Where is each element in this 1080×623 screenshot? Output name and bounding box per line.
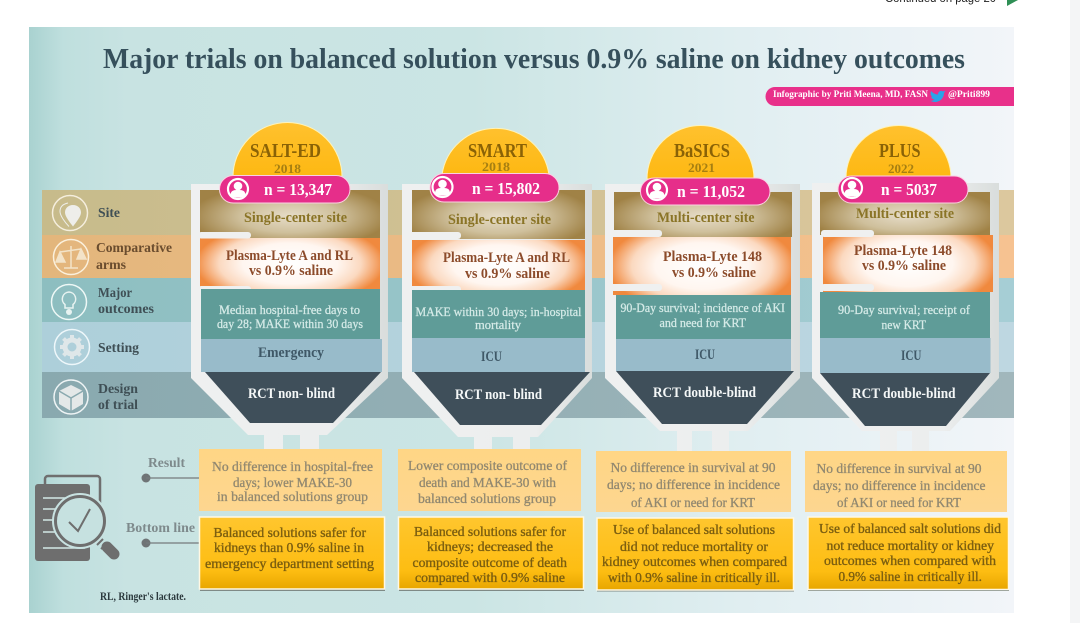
result box: PLUS: No difference in survival at 90 [816,461,982,476]
author credit pill [766,87,1014,106]
arms cell [609,230,791,295]
design cell [205,372,381,423]
result box: SMART: balanced solutions group [418,491,556,506]
row label: design of trial: Design [98,382,138,397]
dome: PLUS title [846,126,951,178]
outcomes cell: day 28; MAKE within 30 days [217,317,363,331]
row label: major outcomes [52,284,155,320]
sample size pill: n = 5037 [881,180,937,199]
dome: SALT-ED title: 2018 [274,161,302,176]
arms cell [198,232,380,293]
site cell [412,190,585,239]
row label: design of trial [54,380,138,414]
design cell: RCT non- blind [248,386,336,402]
dome: SMART title: SMART [468,141,527,162]
site cell [820,192,990,235]
outcomes cell: MAKE within 30 days; in-hospital [416,305,582,319]
row label: setting: Setting [98,341,139,356]
result box: SMART: Lower composite outcome of [408,458,567,473]
setting cell: ICU [901,348,922,364]
dome: SMART title [442,128,549,175]
arms cell: vs 0.9% saline [672,265,757,281]
bottom line box: BaSICS [597,518,794,592]
dome: BaSICS title: BaSICS [674,141,730,162]
result box: BaSICS [596,451,791,512]
icon: twitter bird [930,91,946,102]
site cell: Multi-center site [856,206,955,222]
setting cell [820,338,990,373]
trial bag: PLUS [812,126,999,451]
bottom line box: SMART [398,517,584,591]
arms cell: Plasma-Lyte A and RL [226,248,353,264]
arms cell: Plasma-Lyte 148 [663,249,762,265]
trial bag: BaSICS [605,125,800,451]
bottom line box: SALT-ED: Balanced solutions safer for [214,525,367,540]
dome: SALT-ED title [233,122,342,177]
design cell: RCT double-blind [653,385,757,401]
result box: PLUS: of AKI or need for KRT [837,495,962,510]
bag outline and ports [191,184,388,450]
design cell [616,371,794,424]
result box: PLUS [805,451,1007,512]
bottom line box: SMART: kidneys; decreased the [427,539,553,554]
site cell: Single-center site [244,210,348,226]
bottom line box: PLUS: 0.9% saline in critically ill. [838,569,982,584]
result box: BaSICS: of AKI or need for KRT [631,495,756,510]
row label: comparative arms: arms [96,258,127,273]
bag outline and ports [605,184,800,451]
design cell [820,373,990,426]
bag outline and ports [812,183,999,451]
row label: setting [54,330,139,364]
title: Major trials on balanced solution versus 0.9% saline on kidney outcomes [103,44,965,75]
setting cell: Emergency [258,345,324,361]
dome: SMART title: 2018 [482,159,511,174]
bottom line box: SALT-ED: emergency department setting [205,556,374,571]
result box: BaSICS: No difference in survival at 90 [610,460,776,475]
bottom line box: PLUS: Use of balanced salt solutions did [819,521,1001,536]
result box: SMART [398,449,581,511]
arms cell [821,230,993,292]
bottom line box: BaSICS: kidney outcomes when compared [602,554,787,569]
bottom line connector [126,521,199,548]
outcomes cell [616,295,791,339]
bottom line box: BaSICS: did not reduce mortality or [620,539,769,554]
result box: SALT-ED: in balanced solutions group [217,489,368,504]
bottom line box: BaSICS: Use of balanced salt solutions [613,522,775,537]
sample size pill [430,174,559,202]
dome: BaSICS title [647,125,754,179]
arms cell: Plasma-Lyte 148 [854,243,952,259]
trial bag: SALT-ED [191,122,388,450]
sample size pill [640,178,770,205]
bottom line box: SALT-ED: kidneys than 0.9% saline in [214,540,364,555]
row label: comparative arms [54,240,172,274]
bottom line box: BaSICS: with 0.9% saline in critically ill. [608,570,780,585]
right page margin strip [1070,0,1080,623]
row label: site [52,196,120,230]
row label: comparative arms: Comparative [96,241,172,256]
bottom line box: PLUS: not reduce mortality or kidney [826,538,994,553]
setting cell [201,339,382,372]
trial bag: SMART [402,128,592,450]
dome: PLUS title: PLUS [879,141,921,162]
outcomes cell: mortality [475,318,522,332]
outcomes cell [201,289,380,339]
arms cell [408,232,585,293]
setting cell [616,339,791,371]
icon: document with magnifier [35,476,114,561]
sample size pill: n = 11,052 [677,182,745,201]
author credit pill: @Priti899 [948,90,990,100]
design cell: RCT double-blind [852,386,956,402]
bag outline and ports [402,184,592,450]
dome: SALT-ED title: SALT-ED [250,141,321,162]
bottom line connector: Bottom line [126,521,195,536]
outcomes cell: Median hospital-free days to [219,303,360,317]
outcomes cell: and need for KRT [660,316,746,330]
sample size pill [838,176,968,203]
setting cell: ICU [695,347,715,363]
result box: SALT-ED: days; lower MAKE-30 [233,475,352,490]
row label: major outcomes: Major [98,286,132,301]
site cell [200,190,380,238]
result connector: Result [148,456,185,471]
row bands [42,190,1014,418]
setting cell [412,338,585,372]
author credit pill: Infographic by Priti Meena, MD, FASN [773,90,928,100]
outcomes cell: 90-Day survival; receipt of [838,303,971,317]
design cell [414,372,590,425]
outcomes cell: 90-Day survival; incidence of AKI [620,301,785,315]
site cell: Multi-center site [657,210,755,226]
outcomes cell [820,292,990,338]
bottom line box: SMART: composite outcome of death [412,555,567,570]
row label: site: Site [98,206,120,221]
row label: major outcomes: outcomes [98,302,155,317]
site cell [614,192,792,237]
result box: SMART: death and MAKE-30 with [419,475,556,490]
bottom line box: PLUS: outcomes when compared with [824,553,996,568]
sample size pill [220,176,350,203]
sample size pill: n = 15,802 [472,179,540,198]
bottom line box: SMART: Balanced solutions safer for [414,524,567,539]
result connector [142,456,199,482]
footnote: RL, Ringer's lactate. [100,591,186,603]
result box: SALT-ED [199,449,382,511]
dome: BaSICS title: 2021 [688,160,715,175]
site cell: Single-center site [448,212,552,228]
outcomes cell: new KRT [882,318,926,332]
arms cell: Plasma-Lyte A and RL [443,250,570,266]
bottom line box: PLUS [808,517,1009,591]
result box: PLUS: days; no difference in incidence [813,478,986,493]
dome: PLUS title: 2022 [888,161,914,176]
bottom line box: SALT-ED [200,517,385,591]
setting cell: ICU [481,349,502,365]
result box: BaSICS: days; no difference in incidence [607,477,780,492]
sample size pill: n = 13,347 [264,180,332,199]
outcomes cell [412,290,585,338]
design cell: RCT non- blind [455,387,543,403]
row label: design of trial: of trial [98,398,138,413]
bottom line box: SMART: compared with 0.9% saline [415,570,565,585]
arms cell: vs 0.9% saline [465,266,551,282]
arms cell: vs 0.9% saline [862,258,947,274]
result box: SALT-ED: No difference in hospital-free [212,459,373,474]
arms cell: vs 0.9% saline [249,263,334,279]
